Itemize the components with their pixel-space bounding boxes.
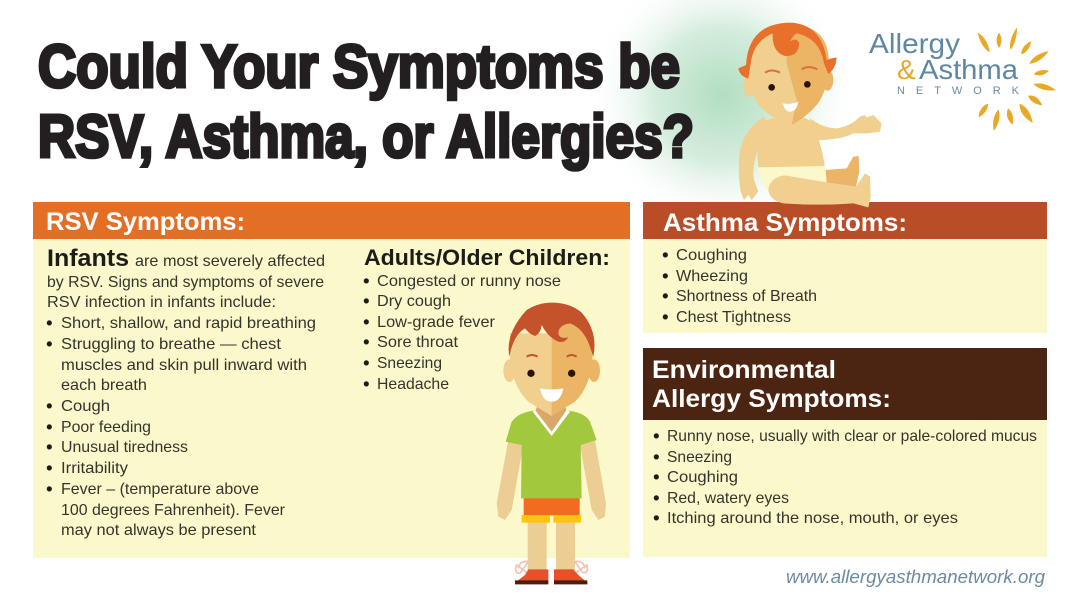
baby torso xyxy=(757,115,825,168)
environmental list: Itching around the nose, mouth, or eyes xyxy=(667,510,958,527)
RSV header bar: RSV Symptoms: xyxy=(46,208,245,236)
adults and older children text block: • xyxy=(363,292,370,312)
infants text block: 100 degrees Fahrenheit). Fever xyxy=(61,502,285,519)
panel: asthma symptoms xyxy=(643,202,1047,333)
logo: Allergy and Asthma Network: Asthma xyxy=(919,54,1018,85)
infants text block: • xyxy=(46,458,53,480)
environmental header bar xyxy=(643,348,1047,420)
adults and older children text block: • xyxy=(363,312,370,334)
adults and older children text block: Sneezing xyxy=(377,355,442,372)
baby head xyxy=(748,25,829,125)
environmental list: • xyxy=(653,426,660,448)
infants text block: Cough xyxy=(61,398,110,415)
boy legs xyxy=(528,520,575,570)
title: Could Your Symptoms be xyxy=(38,33,680,100)
infants text block: Irritability xyxy=(61,460,128,477)
environmental list: Red, watery eyes xyxy=(667,490,789,507)
adults and older children text block: Low-grade fever xyxy=(377,314,495,331)
infants text block: Struggling to breathe — chest xyxy=(61,336,282,353)
logo: Allergy and Asthma Network: Allergy xyxy=(869,28,960,59)
baby face shade xyxy=(787,25,829,125)
infants text block: • xyxy=(46,418,53,438)
boy head xyxy=(510,333,590,416)
boy neck xyxy=(535,403,567,433)
title xyxy=(38,33,694,170)
logo: Allergy and Asthma Network xyxy=(869,28,1055,130)
adults and older children text block: • xyxy=(363,332,370,354)
baby mouth xyxy=(783,102,798,112)
RSV header bar xyxy=(33,202,630,239)
green glow behind baby xyxy=(585,0,860,202)
infants text block: RSV infection in infants include: xyxy=(47,294,276,311)
boy eyebrows xyxy=(527,355,577,357)
asthma list: Coughing xyxy=(676,247,747,264)
infants text block: • xyxy=(46,334,53,356)
boy face shade xyxy=(552,320,593,416)
baby left arm xyxy=(739,117,777,200)
infants text block: • xyxy=(46,480,53,500)
illustration: standing boy xyxy=(497,303,606,584)
infants text block: Short, shallow, and rapid breathing xyxy=(61,315,316,332)
environmental list: Coughing xyxy=(667,469,738,486)
adults and older children text block: Headache xyxy=(377,376,449,393)
asthma list: Wheezing xyxy=(676,268,748,285)
asthma list: Shortness of Breath xyxy=(676,288,817,305)
infants text block: are most severely affected xyxy=(135,253,325,270)
asthma list: • xyxy=(662,286,669,308)
environmental list: • xyxy=(653,488,660,510)
boy shoes xyxy=(515,569,587,584)
environmental header bar: Environmental xyxy=(652,356,836,384)
panel: environmental allergy symptoms xyxy=(643,348,1047,557)
baby hair xyxy=(738,23,837,78)
infants text block xyxy=(46,245,325,539)
adults and older children text block: • xyxy=(363,272,370,292)
infants text block: Infants xyxy=(47,245,129,272)
environmental list: • xyxy=(653,468,660,488)
adults and older children text block: Adults/Older Children: xyxy=(364,245,610,270)
baby far leg xyxy=(825,156,859,187)
adults and older children text block: Sore throat xyxy=(377,334,459,351)
panel: RSV symptoms xyxy=(33,202,630,558)
boy shorts xyxy=(522,497,581,523)
logo: Allergy and Asthma Network: & xyxy=(897,54,916,85)
environmental list: Runny nose, usually with clear or pale-colored mucus xyxy=(667,428,1037,445)
boy shoe laces xyxy=(516,561,587,577)
environmental list: Sneezing xyxy=(667,449,732,466)
logo: Allergy and Asthma Network: NETWORK xyxy=(897,85,1020,97)
asthma header bar xyxy=(643,202,1047,239)
environmental list xyxy=(653,426,1037,530)
baby right arm xyxy=(810,115,882,140)
website url: www.allergyasthmanetwork.org xyxy=(786,567,1045,587)
infants text block: may not always be present xyxy=(61,522,257,539)
infants text block: by RSV. Signs and symptoms of severe xyxy=(47,274,324,291)
icon: sun rays xyxy=(978,28,1055,130)
adults and older children text block: Dry cough xyxy=(377,293,451,310)
infants text block: • xyxy=(46,396,53,418)
boy arms xyxy=(497,440,606,520)
infants text block: each breath xyxy=(61,377,147,394)
illustration: sitting baby xyxy=(738,23,882,207)
baby ears xyxy=(743,75,755,97)
infants text block: • xyxy=(46,438,53,458)
asthma header bar: Asthma Symptoms: xyxy=(663,209,907,237)
baby eyes xyxy=(768,84,775,91)
adults and older children text block: Congested or runny nose xyxy=(377,273,561,290)
infants text block: muscles and skin pull inward with xyxy=(61,357,307,374)
boy collar xyxy=(533,410,570,436)
asthma list: Chest Tightness xyxy=(676,309,791,326)
adults and older children text block xyxy=(363,245,610,396)
adults and older children text block: • xyxy=(363,354,370,374)
infants text block: Fever – (temperature above xyxy=(61,481,259,498)
infants text block: Unusual tiredness xyxy=(61,439,188,456)
boy shirt xyxy=(506,411,597,498)
baby eyebrows xyxy=(765,67,817,73)
boy hair xyxy=(509,303,594,357)
boy eyes xyxy=(527,370,535,377)
baby diaper xyxy=(758,166,827,192)
asthma list xyxy=(662,246,817,328)
asthma list: • xyxy=(662,246,669,266)
environmental list: • xyxy=(653,508,660,530)
environmental header bar: Allergy Symptoms: xyxy=(652,385,891,413)
adults and older children text block: • xyxy=(363,374,370,396)
title: RSV, Asthma, or Allergies? xyxy=(38,103,694,170)
baby near leg xyxy=(768,173,871,207)
environmental list: • xyxy=(653,448,660,468)
boy ears xyxy=(503,359,515,382)
infants text block: Poor feeding xyxy=(61,419,151,436)
infants text block: • xyxy=(46,314,53,334)
asthma list: • xyxy=(662,308,669,328)
asthma list: • xyxy=(662,266,669,288)
boy mouth xyxy=(540,388,563,402)
